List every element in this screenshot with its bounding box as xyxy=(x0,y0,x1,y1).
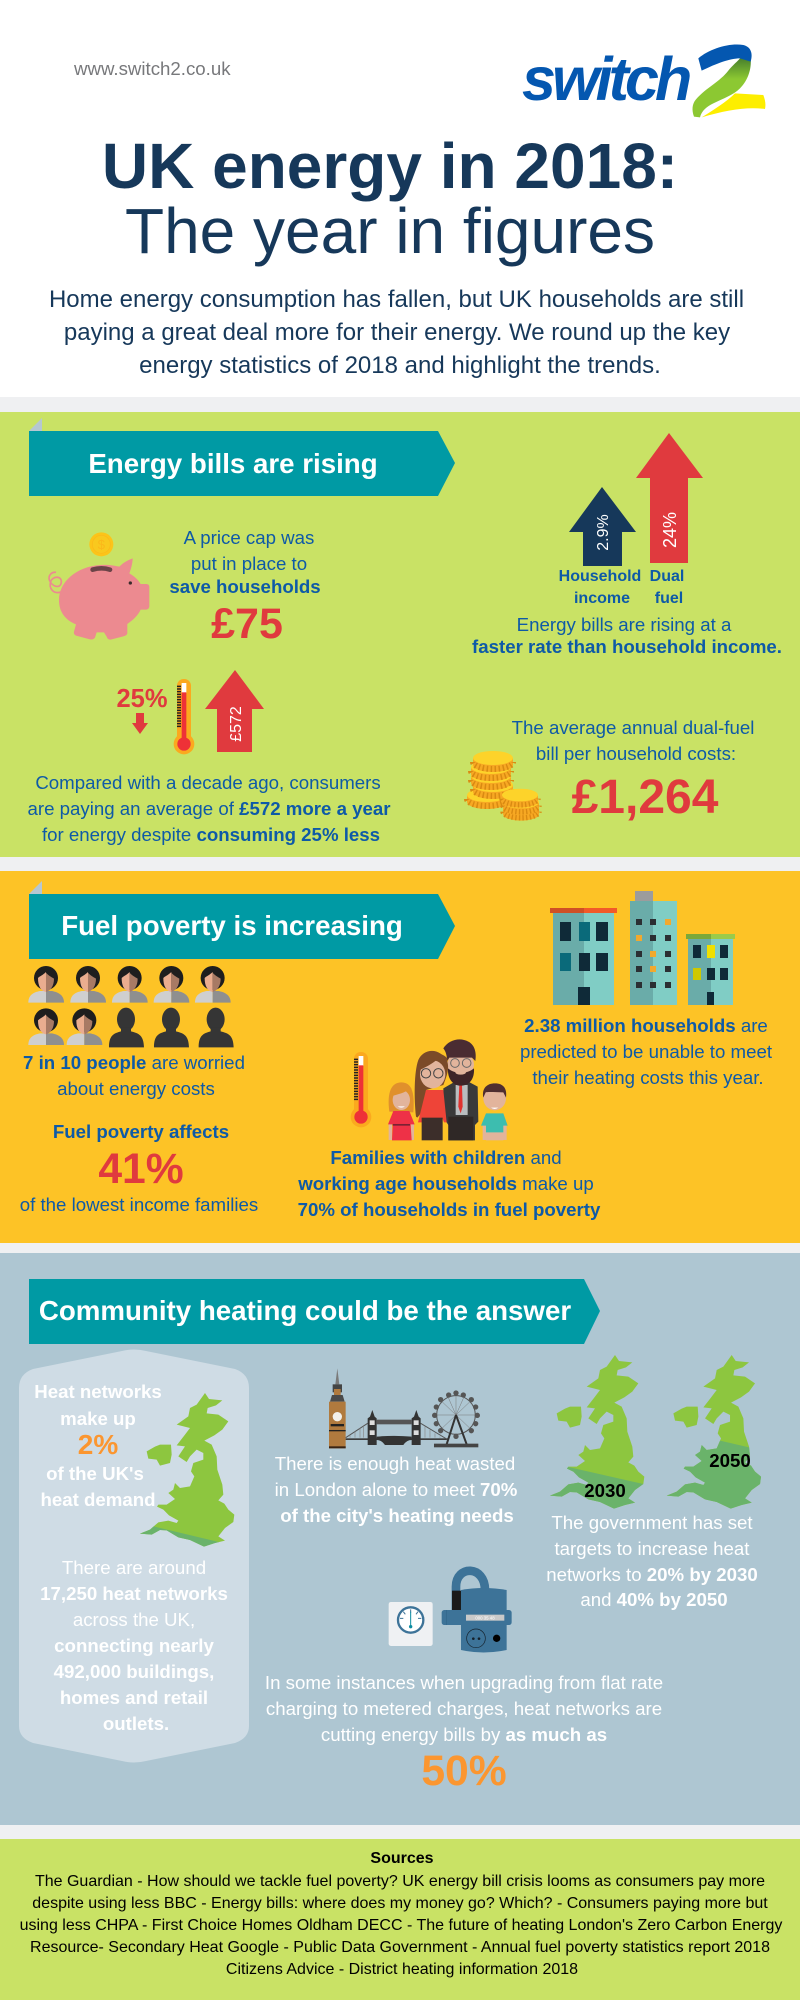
logo: switch2: switch xyxy=(522,45,690,113)
text: government targets xyxy=(546,1512,758,1610)
chart: income vs fuel arrows: income xyxy=(574,590,630,607)
text: price cap: put in place to xyxy=(191,553,307,574)
logo: switch2 xyxy=(522,44,765,117)
boy xyxy=(481,1083,508,1140)
text: heat wasted in London xyxy=(275,1453,518,1526)
panel: energy bills are rising xyxy=(0,412,800,857)
text: compared with a decade ago: Compared with a decade ago, consumers xyxy=(35,772,381,793)
icon: London skyline xyxy=(329,1368,480,1448)
website url: www.switch2.co.uk xyxy=(73,58,231,79)
text: metered charges: cutting energy bills by as much as xyxy=(321,1724,607,1745)
text: heat wasted in London: of the city's heating needs xyxy=(280,1505,514,1526)
stat: 25 percent with down arrow: 25% xyxy=(116,685,168,713)
text: source list: The Guardian - How should we tackle fuel poverty? UK energy bill crisis looms as consumers pay more xyxy=(35,1873,765,1890)
text: heat networks make up 2 percent: heat demand xyxy=(40,1489,156,1510)
text: compared with a decade ago xyxy=(27,772,391,845)
text: source list xyxy=(20,1873,782,1978)
text: metered charges xyxy=(265,1672,663,1795)
stat: 75 pounds: £75 xyxy=(211,600,283,648)
chart: income vs fuel arrows: 24% xyxy=(660,512,680,548)
stat: 41 percent: 41% xyxy=(98,1145,184,1193)
map: 2050 target: 2050 xyxy=(709,1450,751,1471)
arrow: 572 pounds: £572 xyxy=(228,706,245,742)
intro text xyxy=(49,286,744,379)
chart: income vs fuel arrows: 2.9% xyxy=(595,514,612,551)
map: UK with 2 percent shaded xyxy=(140,1393,234,1547)
text: 17,250 heat networks xyxy=(40,1557,228,1734)
text: 17,250 heat networks: 492,000 buildings, xyxy=(54,1661,214,1682)
icon: piggy bank xyxy=(49,532,149,640)
text: metered charges: In some instances when upgrading from flat rate xyxy=(265,1672,663,1693)
text: families with children xyxy=(297,1147,601,1220)
stat: 50 percent: 50% xyxy=(421,1747,507,1795)
panel: fuel poverty is increasing xyxy=(0,871,800,1243)
intro text: Home energy consumption has fallen, but UK households are still xyxy=(49,286,744,313)
text: 17,250 heat networks: homes and retail xyxy=(60,1687,208,1708)
text: 17,250 heat networks: outlets. xyxy=(103,1713,169,1734)
text: 17,250 heat networks: There are around xyxy=(62,1557,206,1578)
panel: sources xyxy=(0,1839,800,2000)
text: metered charges: charging to metered charges, heat networks are xyxy=(266,1698,662,1719)
text: price cap: A price cap was xyxy=(184,527,314,548)
text: families with children: 70% of households in fuel poverty xyxy=(298,1199,601,1220)
text: worried about energy costs xyxy=(23,1052,245,1099)
title xyxy=(102,130,678,267)
text: source list: despite using less BBC - Energy bills: where does my money go? Which? - Consumers paying more but xyxy=(32,1895,768,1912)
text: worried about energy costs: 7 in 10 people are worried xyxy=(23,1052,245,1073)
text: fuel poverty affects 41 percent: Fuel poverty affects xyxy=(53,1121,229,1142)
text: source list: Resource- Secondary Heat Google - Public Data Government - Annual fuel poverty statistics report 2018 xyxy=(30,1939,770,1956)
title: UK energy in 2018: xyxy=(102,130,678,202)
text: government targets: and 40% by 2050 xyxy=(580,1589,728,1610)
heading banner: energy bills xyxy=(29,431,455,496)
icon: buildings xyxy=(550,891,735,1005)
icon: heat meter and dial: 000 35 48 xyxy=(475,1615,495,1620)
chart: income vs fuel arrows: fuel xyxy=(655,590,683,607)
title: The year in figures xyxy=(125,195,655,267)
text: price cap: save households xyxy=(169,576,321,597)
icon: coins xyxy=(467,751,539,821)
map: 2030 target: 2030 xyxy=(584,1480,626,1501)
text: compared with a decade ago: for energy despite consuming 25% less xyxy=(42,824,380,845)
text: average annual bill: bill per household costs: xyxy=(536,743,736,764)
icon: heat meter and dial xyxy=(389,1571,512,1652)
text: government targets: The government has set xyxy=(551,1512,753,1533)
text: 2.38 million households xyxy=(520,1015,773,1088)
heading banner: fuel poverty xyxy=(29,894,455,959)
mother xyxy=(415,1051,448,1140)
text: heat networks make up 2 percent: 2% xyxy=(78,1429,118,1460)
stat: 25 percent with down arrow xyxy=(116,685,168,734)
chart: income vs fuel arrows xyxy=(559,433,703,607)
text: heat networks make up 2 percent: of the UK's xyxy=(46,1463,144,1484)
heading banner: energy bills: Energy bills are rising xyxy=(88,448,378,479)
text: heat networks make up 2 percent xyxy=(34,1381,162,1510)
panel: community heating xyxy=(0,1253,800,1825)
father xyxy=(443,1039,478,1140)
text: bills rising faster xyxy=(472,614,782,657)
text: heat networks make up 2 percent: Heat networks xyxy=(34,1381,162,1402)
pictogram: 7 in 10 people xyxy=(28,966,234,1047)
text: 17,250 heat networks: 17,250 heat networks xyxy=(40,1583,228,1604)
icon: piggy bank: $ xyxy=(98,537,106,552)
text: heat wasted in London: There is enough heat wasted xyxy=(275,1453,515,1474)
icon: family xyxy=(388,1039,508,1140)
text: source list: using less CHPA - First Choice Homes Oldham DECC - The future of heating London's Zero Carbon Energy xyxy=(20,1917,782,1934)
text: compared with a decade ago: are paying an average of £572 more a year xyxy=(27,798,391,819)
text: average annual bill: The average annual dual-fuel xyxy=(512,717,754,738)
text: 2.38 million households: predicted to be unable to meet xyxy=(520,1041,773,1062)
girl xyxy=(388,1082,415,1140)
text: bills rising faster: faster rate than household income. xyxy=(472,636,782,657)
text: heat wasted in London: in London alone to meet 70% xyxy=(275,1479,518,1500)
stat: 1,264 pounds: £1,264 xyxy=(572,771,719,824)
text: families with children: working age households make up xyxy=(297,1173,594,1194)
map: 2030 target xyxy=(550,1355,644,1509)
text: fuel poverty affects 41 percent xyxy=(20,1121,258,1215)
text: bills rising faster: Energy bills are rising at a xyxy=(517,614,732,635)
text: source list: Citizens Advice - District heating information 2018 xyxy=(226,1961,578,1978)
intro text: energy statistics of 2018 and highlight the trends. xyxy=(139,352,661,379)
text: fuel poverty affects 41 percent: of the lowest income families xyxy=(20,1194,258,1215)
heading banner: community heating xyxy=(29,1279,600,1344)
heading banner: fuel poverty: Fuel poverty is increasing xyxy=(61,910,403,941)
heading: sources: Sources xyxy=(370,1850,434,1867)
text: families with children: Families with children and xyxy=(330,1147,562,1168)
intro text: paying a great deal more for their energy. We round up the key xyxy=(64,319,730,346)
heading banner: community heating: Community heating could be the answer xyxy=(39,1295,571,1326)
text: 2.38 million households: 2.38 million households are xyxy=(524,1015,768,1036)
icon: thermometer xyxy=(174,679,194,754)
card: heat networks xyxy=(19,1350,268,1762)
text: price cap xyxy=(169,527,321,648)
map: 2050 target xyxy=(666,1355,761,1509)
text: worried about energy costs: about energy costs xyxy=(57,1078,215,1099)
text: government targets: networks to 20% by 2030 xyxy=(546,1564,758,1585)
text: government targets: targets to increase heat xyxy=(555,1538,750,1559)
text: average annual bill xyxy=(512,717,754,824)
icon: thermometer xyxy=(351,1052,371,1127)
chart: income vs fuel arrows: Household xyxy=(559,568,641,585)
chart: income vs fuel arrows: Dual xyxy=(650,568,684,585)
arrow: 572 pounds xyxy=(205,670,264,752)
text: 2.38 million households: their heating costs this year. xyxy=(532,1067,764,1088)
text: 17,250 heat networks: across the UK, xyxy=(73,1609,195,1630)
text: 17,250 heat networks: connecting nearly xyxy=(54,1635,214,1656)
text: heat networks make up 2 percent: make up xyxy=(60,1408,136,1429)
